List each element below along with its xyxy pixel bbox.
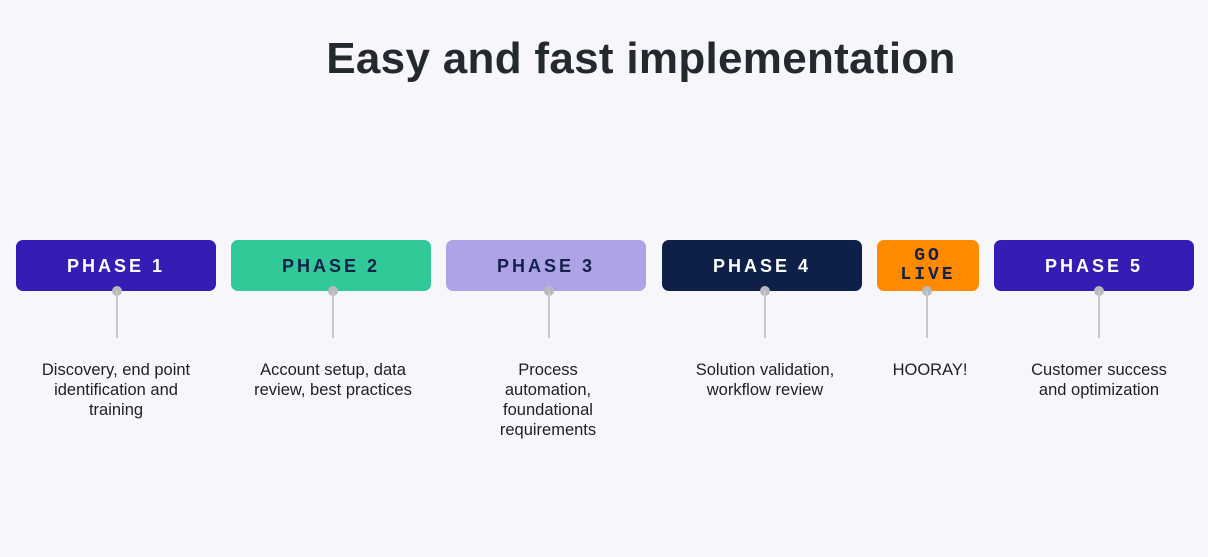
desc 1: training [89, 401, 143, 419]
desc 2 [254, 361, 412, 399]
desc 4: workflow review [707, 381, 823, 399]
phase 2 [231, 240, 431, 291]
desc 1: Discovery, end point [42, 361, 190, 379]
title: Easy and fast implementation [326, 34, 956, 83]
go live: LIVE [900, 264, 956, 284]
go live: GO [914, 246, 942, 266]
phase 4 [662, 240, 862, 291]
desc 3: requirements [500, 421, 596, 439]
desc 3: Process [518, 361, 578, 379]
phase 3: PHASE 3 [497, 256, 595, 276]
phase 1 [16, 240, 216, 291]
phase 4: PHASE 4 [713, 256, 811, 276]
desc 3 [500, 361, 596, 439]
desc 3: foundational [503, 401, 593, 419]
desc 2: Account setup, data [260, 361, 406, 379]
phase 2: PHASE 2 [282, 256, 380, 276]
desc 2: review, best practices [254, 381, 412, 399]
desc 1 [42, 361, 190, 419]
phase 5: PHASE 5 [1045, 256, 1143, 276]
phase 1: PHASE 1 [67, 256, 165, 276]
desc 5: Customer success [1031, 361, 1167, 379]
phase 5 [994, 240, 1194, 291]
phase 3 [446, 240, 646, 291]
desc 4 [696, 361, 834, 399]
desc 4: Solution validation, [696, 361, 834, 379]
desc 5 [1031, 361, 1167, 399]
desc go live: HOORAY! [893, 361, 967, 379]
desc 3: automation, [505, 381, 591, 399]
desc 1: identification and [54, 381, 178, 399]
desc 5: and optimization [1039, 381, 1159, 399]
go live [877, 240, 979, 291]
